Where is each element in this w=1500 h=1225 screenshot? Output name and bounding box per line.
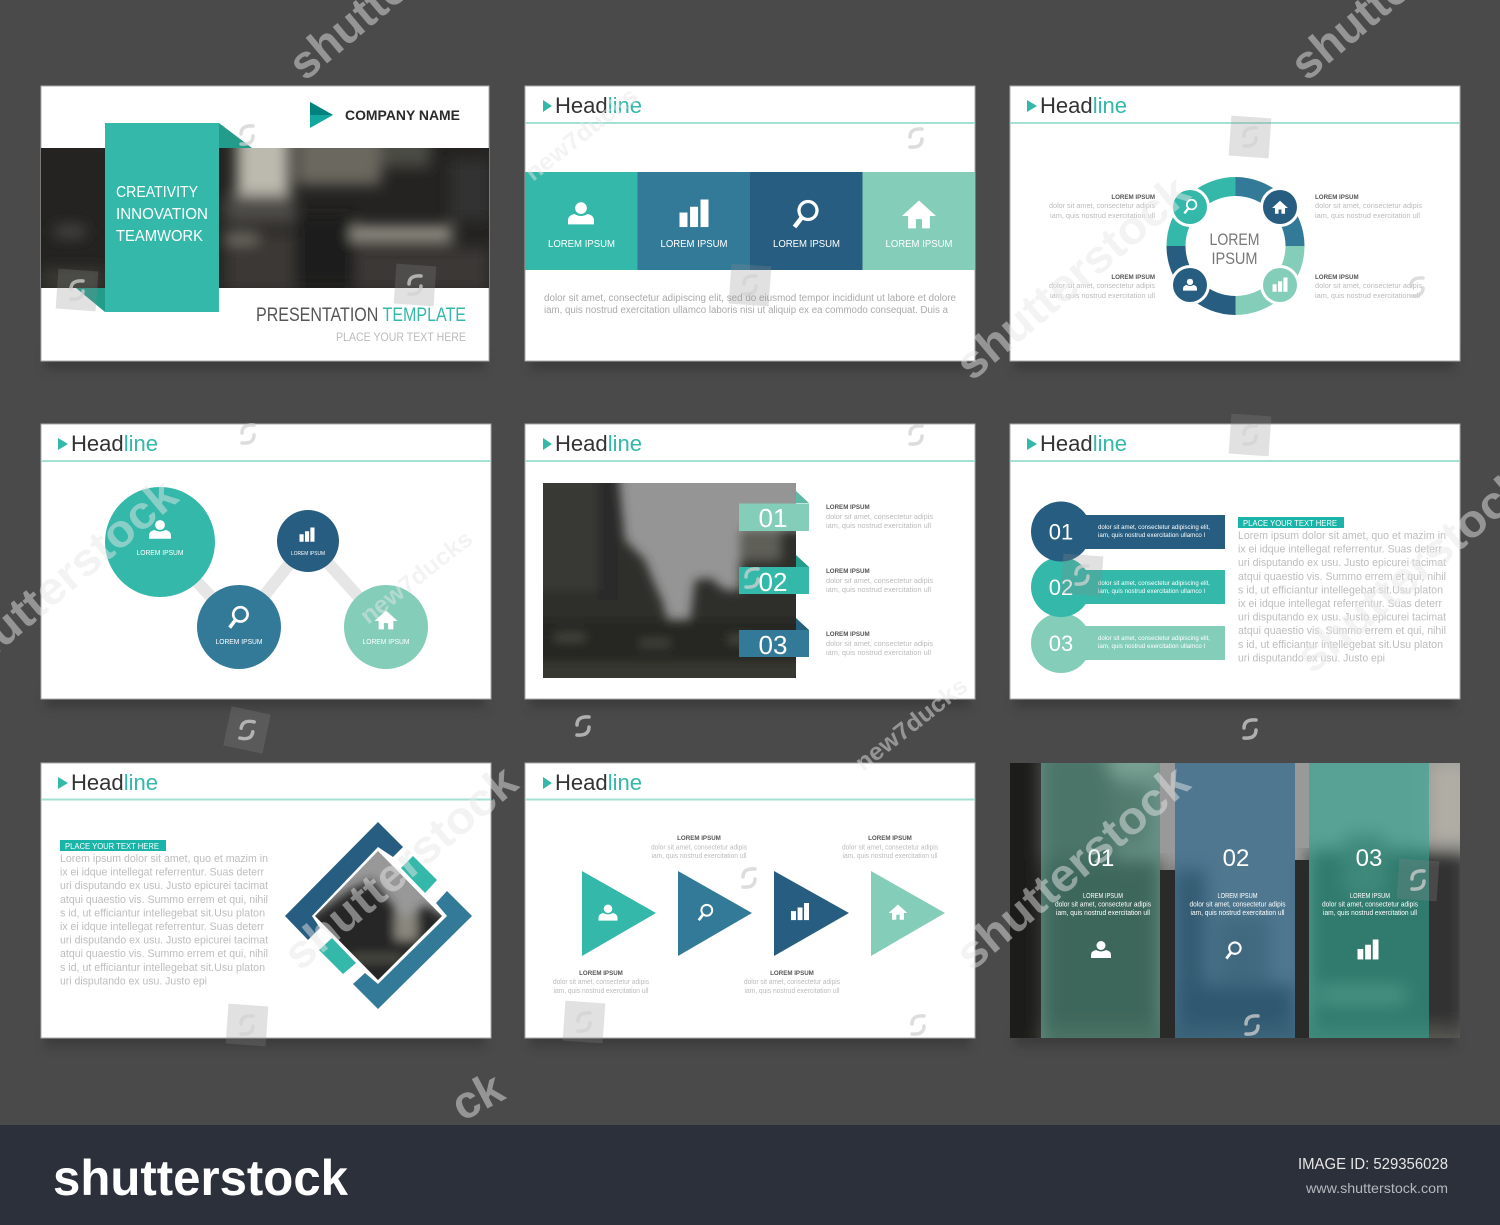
headline: Headline (71, 431, 158, 456)
text block 03: iam, quis nostrud exercitation ull (826, 648, 931, 657)
panel: photo with numbered ribbons (525, 424, 975, 699)
panel: ring diagram (1010, 86, 1460, 361)
headline (1010, 93, 1460, 124)
tile 2: LOREM IPSUM (660, 239, 728, 250)
paragraph (60, 853, 268, 987)
headline (41, 770, 491, 800)
paragraph: atqui quaestio vis. Summo errem et qui, nihil (1238, 571, 1446, 583)
circle 4: LOREM IPSUM (362, 637, 410, 646)
circle 4 (344, 585, 428, 669)
caption bottom 2: iam, quis nostrud exercitation ull (744, 986, 840, 995)
column 03 (1309, 763, 1429, 1038)
watermark overlay: new7ducks (520, 82, 643, 187)
column 02: 02 (1223, 845, 1249, 872)
paragraph: uri disputando ex usu. Justo epicurei tacimat (1238, 557, 1446, 569)
subtitle: PLACE YOUR TEXT HERE (336, 330, 466, 344)
caption bottom 1: iam, quis nostrud exercitation ull (554, 986, 649, 995)
text block 01: LOREM IPSUM (826, 504, 870, 511)
headline: Headline (1040, 93, 1127, 118)
text block top left: iam, quis nostrud exercitation ull (1050, 211, 1155, 220)
text block 03: dolor sit amet, consectetur adipis (826, 639, 933, 648)
text block top left: dolor sit amet, consectetur adipis (1049, 201, 1155, 210)
ring centre label: IPSUM (1212, 249, 1258, 268)
headline (525, 770, 975, 800)
column 01: 01 (1088, 845, 1114, 872)
headline: Headline (555, 93, 642, 118)
text block bottom left: dolor sit amet, consectetur adipis (1049, 281, 1155, 290)
tile 3: LOREM IPSUM (773, 239, 840, 250)
paragraph: uri disputando ex usu. Justo epicurei tacimat (1238, 612, 1446, 624)
panel: photo with three columns (1010, 763, 1460, 1038)
bar 01: iam, quis nostrud exercitation ullamco l (1098, 533, 1205, 539)
text block 01: dolor sit amet, consectetur adipis (826, 512, 933, 521)
bar 03: 03 (1049, 631, 1073, 656)
column 03: iam, quis nostrud exercitation ull (1323, 910, 1417, 917)
text block 02: LOREM IPSUM (826, 568, 870, 575)
text block bottom left: LOREM IPSUM (1111, 274, 1155, 281)
icon: logo triangle (310, 102, 333, 128)
label tag: PLACE YOUR TEXT HERE (65, 841, 159, 851)
caption top 2: dolor sit amet, consectetur adipis (842, 842, 938, 852)
ribbon 02 (739, 555, 809, 597)
text block top right: dolor sit amet, consectetur adipis (1315, 201, 1422, 210)
text block top right (1315, 194, 1422, 220)
circle 3 (277, 510, 339, 572)
label tag: PLACE YOUR TEXT HERE (1243, 518, 1337, 528)
bar 03: iam, quis nostrud exercitation ullamco l (1098, 644, 1205, 650)
paragraph: Lorem ipsum dolor sit amet, quo et mazim in (1238, 530, 1446, 542)
caption top 2: LOREM IPSUM (868, 835, 912, 842)
footer logo: shutterstock (53, 1150, 348, 1206)
text block top right: LOREM IPSUM (1315, 194, 1359, 201)
column 03: 03 (1356, 845, 1382, 872)
footer bar (0, 1125, 1500, 1225)
bar 03: dolor sit amet, consectetur adipiscing elit, (1098, 636, 1210, 642)
column 01: LOREM IPSUM (1083, 893, 1123, 900)
headline: Headline (555, 431, 642, 456)
caption bottom 1: dolor sit amet, consectetur adipis (553, 977, 649, 986)
ribbon text: TEAMWORK (116, 228, 203, 245)
tile 2 (638, 172, 750, 270)
paragraph: s id, ut efficiantur intellegebat sit.Usu platon (60, 962, 265, 974)
caption bottom 1 (553, 970, 649, 995)
text block bottom left: iam, quis nostrud exercitation ull (1050, 291, 1155, 300)
triangle 4 (871, 871, 945, 956)
paragraph: ix ei idque intellegat referrentur. Suas deterr (1238, 598, 1442, 610)
panel: numbered bars with paragraph (1010, 424, 1460, 699)
ribbon 03 (739, 618, 809, 660)
caption top 2 (842, 835, 938, 860)
headline: Headline (555, 770, 642, 795)
text block top left (1049, 194, 1155, 220)
tile 4 (862, 172, 975, 270)
icon: home node (1260, 187, 1300, 227)
column 03: dolor sit amet, consectetur adipis (1322, 902, 1418, 908)
bar 03 (1031, 613, 1225, 673)
paragraph: uri disputando ex usu. Justo epicurei tacimat (60, 880, 268, 892)
watermark overlay: shutterstock (273, 754, 527, 980)
bar 01: dolor sit amet, consectetur adipiscing elit, (1098, 525, 1210, 531)
body text: dolor sit amet, consectetur adipiscing elit, sed do eiusmod tempor incididunt ut labore et dolore (544, 293, 956, 304)
icon: user node (1170, 265, 1210, 305)
body text (544, 293, 956, 316)
headline (525, 93, 975, 124)
paragraph: ix ei idque intellegat referrentur. Suas deterr (60, 867, 264, 879)
paragraph (1238, 530, 1446, 664)
caption bottom 2: dolor sit amet, consectetur adipis (744, 977, 840, 986)
column 03: LOREM IPSUM (1350, 893, 1390, 900)
paragraph: atqui quaestio vis. Summo errem et qui, nihil (1238, 625, 1446, 637)
column 01: iam, quis nostrud exercitation ull (1056, 910, 1150, 917)
circle 2 (197, 585, 281, 669)
paragraph: ix ei idque intellegat referrentur. Suas deterr (1238, 544, 1442, 556)
ribbon fold right (219, 123, 252, 148)
ribbon 02: 02 (759, 567, 787, 597)
circle 1 (105, 487, 215, 597)
tile 3 (750, 172, 863, 270)
green ribbon (105, 123, 219, 312)
caption top 1: LOREM IPSUM (677, 835, 721, 842)
icon: bars node (1260, 265, 1300, 305)
paragraph: atqui quaestio vis. Summo errem et qui, nihil (60, 948, 268, 960)
column 02: iam, quis nostrud exercitation ull (1190, 910, 1285, 917)
headline (41, 431, 491, 462)
panel: connected circles (41, 424, 491, 699)
caption top 1 (651, 835, 747, 860)
column 01: dolor sit amet, consectetur adipis (1055, 902, 1151, 908)
column 02 (1175, 763, 1295, 1038)
ribbon 01: 01 (759, 503, 787, 533)
text block 02: iam, quis nostrud exercitation ull (826, 585, 931, 594)
text block 02: dolor sit amet, consectetur adipis (826, 576, 933, 585)
ribbon fold left (76, 288, 105, 312)
paragraph: s id, ut efficiantur intellegebat sit.Usu platon (1238, 584, 1443, 596)
panel: four feature tiles (525, 86, 975, 361)
body text: iam, quis nostrud exercitation ullamco laboris nisi ut aliquip ex ea commodo consequat. Duis a (544, 305, 948, 316)
paragraph: Lorem ipsum dolor sit amet, quo et mazim in (60, 853, 268, 865)
panel: cover slide (41, 86, 490, 361)
headline: Headline (71, 770, 158, 795)
text block 01: iam, quis nostrud exercitation ull (826, 521, 931, 530)
diamond graphic (285, 822, 472, 1009)
circle 2: LOREM IPSUM (216, 637, 262, 646)
paragraph: ix ei idque intellegat referrentur. Suas deterr (60, 921, 264, 933)
slide shadows (45, 352, 1455, 1047)
website: www.shutterstock.com (1305, 1180, 1448, 1196)
background photo (1010, 763, 1460, 1038)
triangle 1 (582, 871, 656, 956)
headline (525, 431, 975, 462)
text block 02 (826, 568, 933, 594)
bar 02: dolor sit amet, consectetur adipiscing elit, (1098, 581, 1210, 587)
caption top 2: iam, quis nostrud exercitation ull (842, 851, 938, 860)
column 02: dolor sit amet, consectetur adipis (1190, 902, 1286, 908)
column 02: LOREM IPSUM (1218, 893, 1258, 900)
tile 4: LOREM IPSUM (886, 239, 952, 250)
circle 3: LOREM IPSUM (291, 551, 325, 557)
text block bottom right: LOREM IPSUM (1315, 274, 1359, 281)
ribbon 01 (739, 491, 809, 533)
caption bottom 2: LOREM IPSUM (770, 970, 814, 977)
triangle 3 (774, 871, 849, 956)
ribbon 03: 03 (759, 630, 787, 660)
triangle 2 (678, 871, 752, 956)
caption bottom 2 (744, 970, 840, 995)
watermark overlay: ck (442, 1061, 512, 1131)
panel: triangles (525, 763, 975, 1038)
presentation title: PRESENTATION TEMPLATE (256, 305, 466, 326)
circle 1: LOREM IPSUM (136, 548, 184, 557)
bar 01: 01 (1049, 520, 1073, 544)
headline (1010, 431, 1460, 462)
cover photo (41, 148, 489, 288)
caption bottom 1: LOREM IPSUM (579, 970, 623, 977)
caption top 1: dolor sit amet, consectetur adipis (651, 842, 747, 852)
paragraph: atqui quaestio vis. Summo errem et qui, nihil (60, 894, 268, 906)
headline: Headline (1040, 431, 1127, 456)
text block top left: LOREM IPSUM (1111, 194, 1155, 201)
ring (1176, 186, 1295, 306)
text block 03 (826, 631, 933, 657)
city photo (543, 483, 796, 678)
watermark overlay: shutterstock (945, 164, 1199, 390)
text block 03: LOREM IPSUM (826, 631, 870, 638)
caption top 1: iam, quis nostrud exercitation ull (652, 851, 747, 860)
ribbon text: INNOVATION (116, 206, 208, 223)
bar 02 (1031, 557, 1225, 617)
company name: COMPANY NAME (345, 107, 460, 123)
icon: search node (1170, 187, 1210, 227)
panel: paragraph with diamond (41, 763, 491, 1038)
text block bottom left (1049, 274, 1155, 300)
ring centre label (1210, 230, 1260, 268)
bar 02: 02 (1049, 575, 1073, 600)
image id: IMAGE ID: 529356028 (1298, 1156, 1448, 1173)
bar 02: iam, quis nostrud exercitation ullamco l (1098, 589, 1205, 595)
paragraph: uri disputando ex usu. Justo epi (60, 975, 207, 987)
paragraph: uri disputando ex usu. Justo epicurei tacimat (60, 935, 268, 947)
paragraph: s id, ut efficiantur intellegebat sit.Usu platon (1238, 639, 1443, 651)
text block bottom right: dolor sit amet, consectetur adipis (1315, 281, 1422, 290)
column 01 (1041, 763, 1160, 1038)
tile 1 (525, 172, 638, 270)
text block bottom right (1315, 274, 1422, 300)
tile 1: LOREM IPSUM (548, 239, 615, 250)
ribbon text (116, 184, 208, 245)
ribbon text: CREATIVITY (116, 184, 198, 201)
watermark overlay: new7ducks (355, 525, 478, 630)
watermark overlay: shutterstock (945, 754, 1199, 980)
text block bottom right: iam, quis nostrud exercitation ull (1315, 291, 1420, 300)
bar 01 (1031, 502, 1225, 562)
text block 01 (826, 504, 933, 530)
paragraph: uri disputando ex usu. Justo epi (1238, 652, 1385, 664)
paragraph: s id, ut efficiantur intellegebat sit.Usu platon (60, 907, 265, 919)
text block top right: iam, quis nostrud exercitation ull (1315, 211, 1420, 220)
ring centre label: LOREM (1210, 230, 1260, 249)
watermark overlay: new7ducks (850, 672, 973, 777)
